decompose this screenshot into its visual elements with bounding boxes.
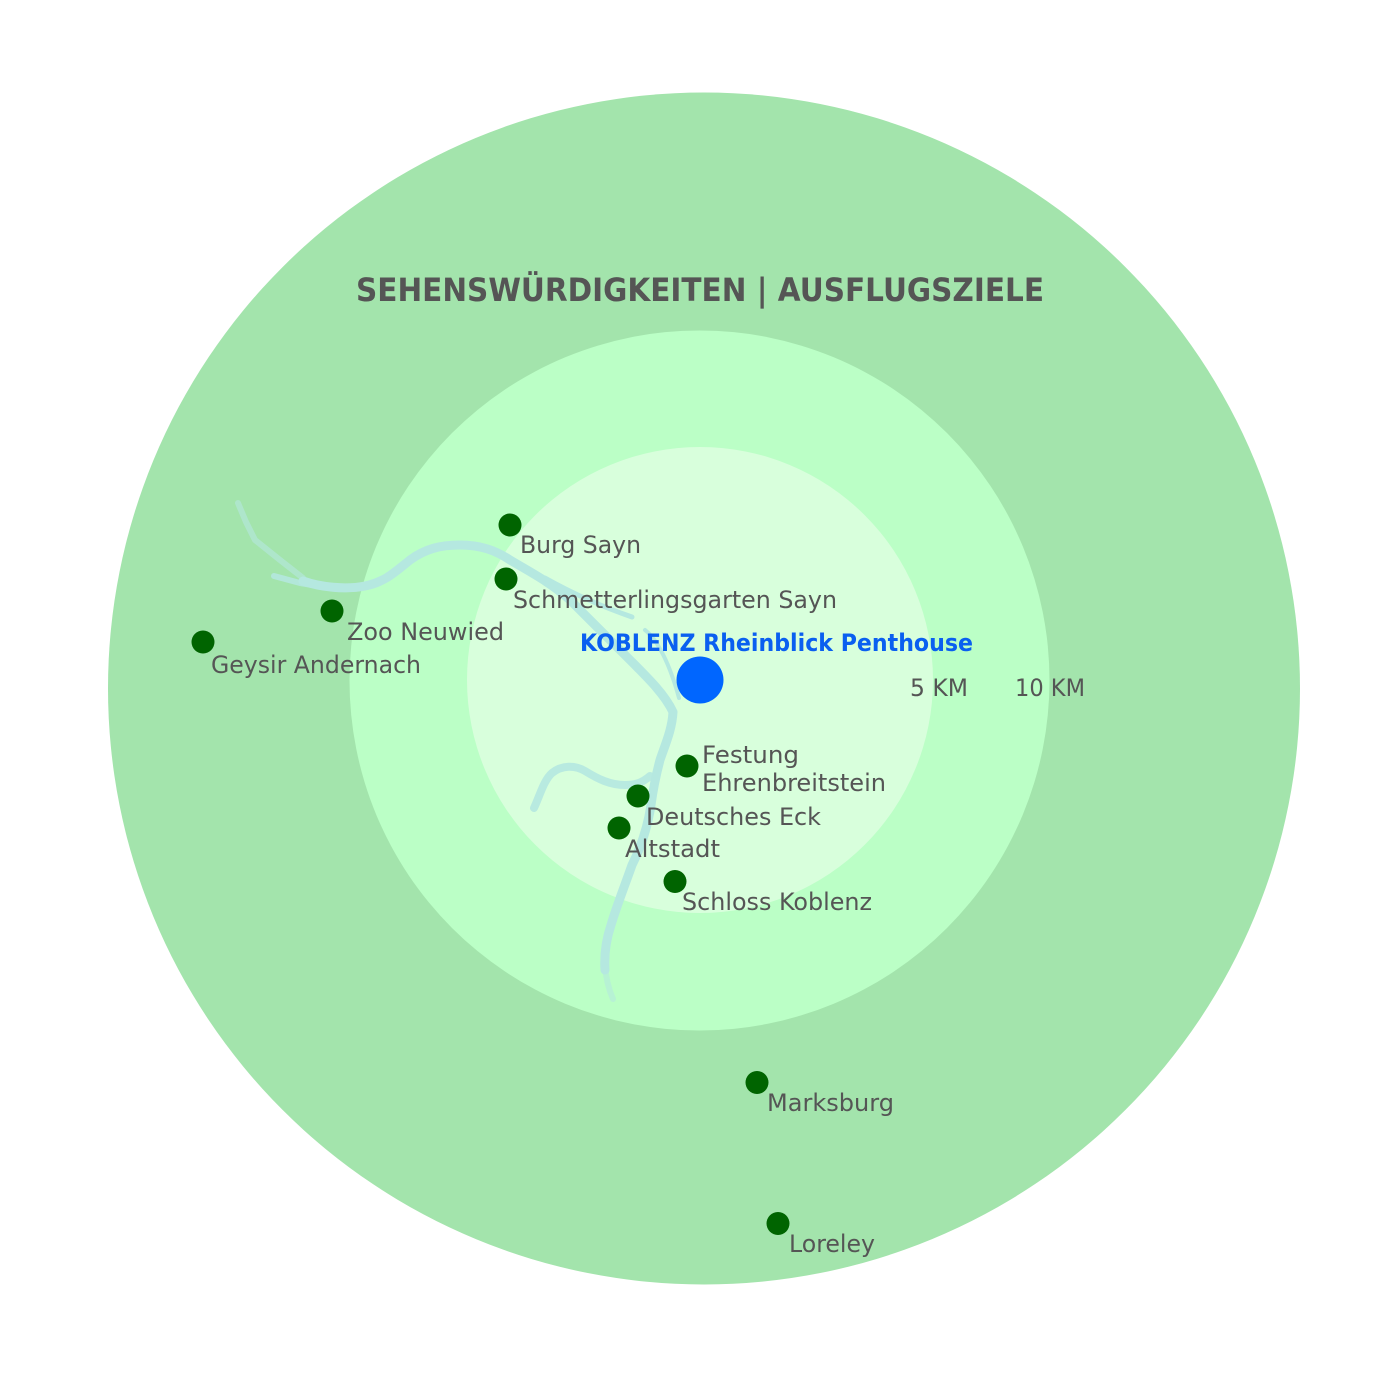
home marker label: KOBLENZ Rheinblick Penthouse (580, 629, 973, 657)
place: Loreley (766, 1212, 875, 1258)
place: Deutsches Eck: Deutsches Eck (646, 803, 821, 831)
rivers (238, 503, 679, 999)
place: Festung Ehrenbreitstein: Festung (702, 741, 799, 769)
place: Loreley: Loreley (789, 1230, 875, 1258)
place: Burg Sayn: Burg Sayn (520, 531, 641, 559)
river: Rhine lower end (605, 965, 613, 999)
place: Zoo Neuwied: Zoo Neuwied (347, 618, 504, 646)
river: northern side arm (545, 578, 632, 617)
distance label: 10 km: 10 KM (1015, 674, 1085, 702)
zone: 5 km middle circle (350, 330, 1050, 1030)
distance label: 5 km: 5 KM (910, 674, 968, 702)
place: Zoo Neuwied (320, 600, 504, 646)
place: Altstadt (608, 816, 720, 863)
zone: 10 km outer circle (108, 92, 1300, 1284)
zone: inner circle (467, 447, 933, 913)
title: SEHENSWÜRDIGKEITEN | AUSFLUGSZIELE (356, 271, 1044, 310)
place: Altstadt: Altstadt (625, 835, 720, 863)
river: Rhine main course (303, 545, 673, 970)
river: arm near the blue marker (645, 630, 679, 698)
place: Marksburg (746, 1071, 894, 1117)
river: Rhine upper section (238, 503, 303, 578)
place: Burg Sayn (498, 514, 641, 559)
place: Geysir Andernach (192, 630, 421, 679)
place: Deutsches Eck (626, 784, 821, 831)
place: Schloss Koblenz: Schloss Koblenz (682, 888, 872, 916)
place: Schmetterlingsgarten Sayn (494, 568, 837, 614)
place: Schloss Koblenz (664, 870, 872, 916)
place: Festung Ehrenbreitstein (676, 741, 886, 797)
home marker: blue dot (676, 656, 724, 704)
place: Geysir Andernach: Geysir Andernach (211, 651, 421, 679)
river: Rhine side arm (274, 576, 337, 589)
place: Schmetterlingsgarten Sayn: Schmetterlingsgarten Sayn (513, 586, 837, 614)
place: Festung Ehrenbreitstein: Ehrenbreitstein (702, 769, 886, 797)
river: Moselle (534, 767, 650, 808)
place: Marksburg: Marksburg (767, 1089, 894, 1117)
